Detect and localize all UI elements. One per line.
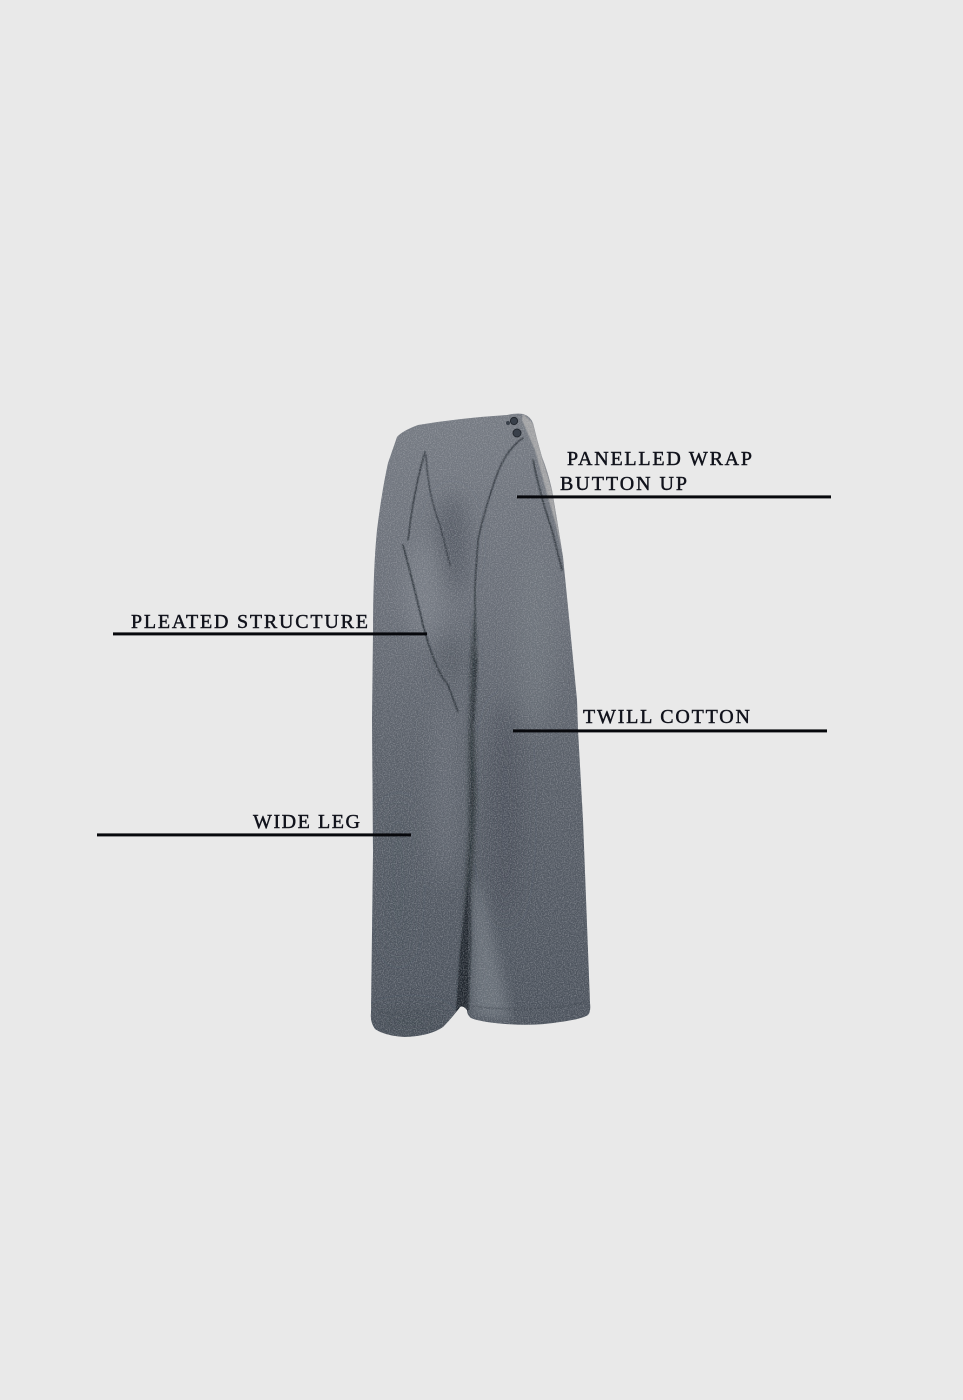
icon: two waistband buttons — [506, 417, 521, 437]
fabric grain — [365, 410, 597, 1040]
callout: panelled wrap button up: BUTTON UP — [560, 473, 687, 495]
hem line — [472, 1006, 514, 1010]
centre leg split shadow — [458, 610, 477, 1012]
callout: pleated structure — [113, 611, 427, 635]
wrap panel seam and pleats — [403, 438, 562, 720]
callout: pleated structure: PLEATED STRUCTURE — [131, 611, 368, 633]
soft shadows and highlights — [370, 495, 555, 1034]
light shaded right waist edge — [522, 414, 563, 557]
inner leg light panel — [472, 880, 510, 1022]
callout: wide leg: WIDE LEG — [253, 811, 360, 833]
callout: twill cotton — [513, 706, 827, 732]
garment: grey wide-leg trousers — [365, 410, 597, 1040]
callout: twill cotton: TWILL COTTON — [583, 706, 750, 728]
callout: panelled wrap button up — [517, 448, 831, 498]
callout: panelled wrap button up: PANELLED WRAP — [567, 448, 752, 470]
callout: wide leg — [97, 811, 411, 836]
